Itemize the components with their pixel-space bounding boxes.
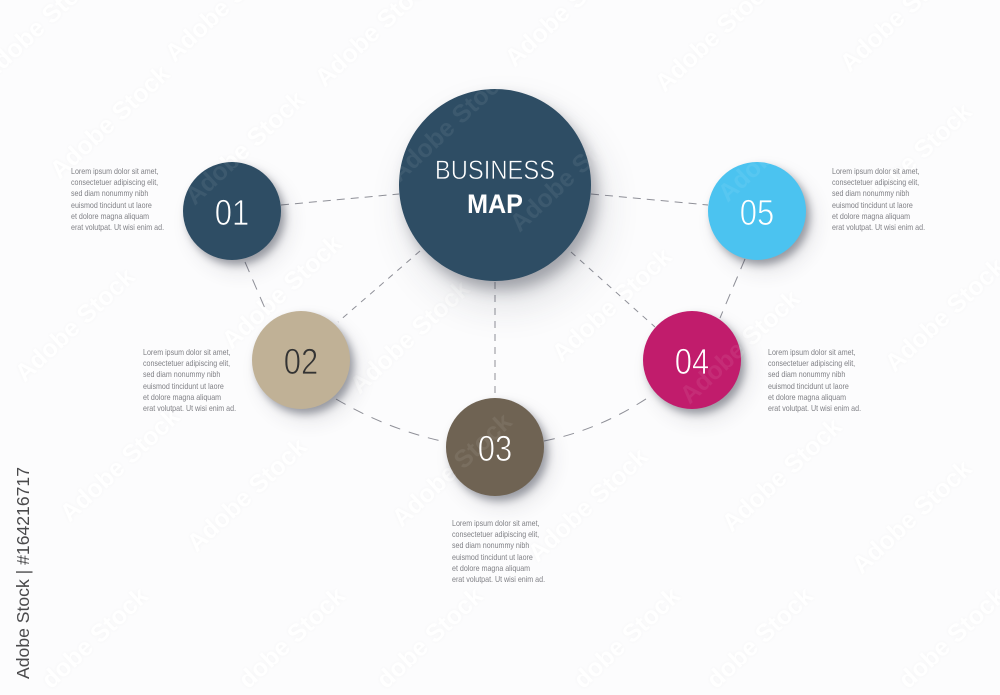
watermark overlay on circles: Adobe Stock <box>385 63 515 187</box>
text block 02: Lorem ipsum dolor sit amet, <box>143 347 231 357</box>
text block 05: Lorem ipsum dolor sit amet, <box>832 166 920 176</box>
circle 05 <box>708 162 806 260</box>
text block 01: Lorem ipsum dolor sit amet, <box>71 166 159 176</box>
circle 02: 02 <box>284 341 318 382</box>
watermark layer: Adobe Stock <box>523 443 653 567</box>
circle 03: 03 <box>478 428 512 469</box>
watermark layer: Adobe Stock <box>182 433 312 557</box>
text block 03 <box>452 518 545 584</box>
text block 03: et dolore magna aliquam <box>452 563 530 573</box>
watermark layer: Adobe Stock <box>180 86 310 210</box>
watermark overlay on circles: Adobe Stock <box>180 86 310 210</box>
text block 02: sed diam nonummy nibh <box>143 369 220 379</box>
watermark layer: dobe Stock <box>701 582 819 694</box>
text block 01: euismod tincidunt ut laore <box>71 200 152 210</box>
text block 02: erat volutpat. Ut wisi enim ad. <box>143 403 236 413</box>
watermark layer: Adobe Stock <box>217 230 347 354</box>
text block 03: sed diam nonummy nibh <box>452 540 529 550</box>
text block 01: consectetuer adipiscing elit, <box>71 177 158 187</box>
text block 03: consectetuer adipiscing elit, <box>452 529 539 539</box>
watermark layer: Adobe Stock <box>55 403 185 527</box>
circle 04 <box>643 311 741 409</box>
circle 02 <box>252 311 350 409</box>
text block 02 <box>143 347 236 413</box>
text block 01 <box>71 166 164 232</box>
watermark layer: Adobe Stock <box>45 60 175 184</box>
text block 05: euismod tincidunt ut laore <box>832 200 913 210</box>
stock id label: Adobe Stock | #164216717 <box>13 467 33 679</box>
circle 04: 04 <box>675 341 709 382</box>
circle 01: 01 <box>215 192 249 233</box>
watermark layer: dobe Stock <box>371 582 489 694</box>
watermark overlay on circles: Adobe Stock <box>505 113 635 237</box>
text block 05: sed diam nonummy nibh <box>832 188 909 198</box>
watermark layer: Adobe Stock <box>10 263 140 387</box>
text block 05: et dolore magna aliquam <box>832 211 910 221</box>
watermark layer: Adobe Stock <box>847 98 977 222</box>
text block 04: Lorem ipsum dolor sit amet, <box>768 347 856 357</box>
text block 04 <box>768 347 861 413</box>
watermark layer: Adobe Stock <box>675 285 805 409</box>
text block 05 <box>832 166 925 232</box>
text block 03: erat volutpat. Ut wisi enim ad. <box>452 574 545 584</box>
watermark layer: Adobe Stock <box>345 275 475 399</box>
text block 02: et dolore magna aliquam <box>143 392 221 402</box>
watermark layer: Adobe Stock <box>387 408 517 532</box>
text block 03: euismod tincidunt ut laore <box>452 552 533 562</box>
text block 03: Lorem ipsum dolor sit amet, <box>452 518 540 528</box>
watermark layer: dobe Stock <box>568 582 686 694</box>
circle 03 <box>446 398 544 496</box>
watermark layer: dobe Stock <box>36 582 154 694</box>
watermark layer: Adobe Stock <box>547 243 677 367</box>
text block 02: euismod tincidunt ut laore <box>143 381 224 391</box>
watermark overlay on circles: Adobe Stock <box>713 83 843 207</box>
text block 04: et dolore magna aliquam <box>768 392 846 402</box>
text block 01: erat volutpat. Ut wisi enim ad. <box>71 222 164 232</box>
watermark overlay on circles: Adobe Stock <box>217 230 347 354</box>
watermark layer: dobe Stock <box>233 582 351 694</box>
watermark overlay on circles: Adobe Stock <box>387 408 517 532</box>
text block 04: sed diam nonummy nibh <box>768 369 845 379</box>
text block 04: consectetuer adipiscing elit, <box>768 358 855 368</box>
central circle: business map <box>399 89 591 281</box>
watermark layer: Adobe Stock <box>847 455 977 579</box>
watermark layer: Adobe Stock <box>717 413 847 537</box>
heading: map: MAP <box>467 189 523 219</box>
heading: business: BUSINESS <box>435 155 555 185</box>
text block 05: consectetuer adipiscing elit, <box>832 177 919 187</box>
text block 04: erat volutpat. Ut wisi enim ad. <box>768 403 861 413</box>
text block 02: consectetuer adipiscing elit, <box>143 358 230 368</box>
text block 01: et dolore magna aliquam <box>71 211 149 221</box>
text block 01: sed diam nonummy nibh <box>71 188 148 198</box>
circle 05: 05 <box>740 192 774 233</box>
text block 04: euismod tincidunt ut laore <box>768 381 849 391</box>
watermark overlay on circles: Adobe Stock <box>675 285 805 409</box>
text block 05: erat volutpat. Ut wisi enim ad. <box>832 222 925 232</box>
circle 01 <box>183 162 281 260</box>
